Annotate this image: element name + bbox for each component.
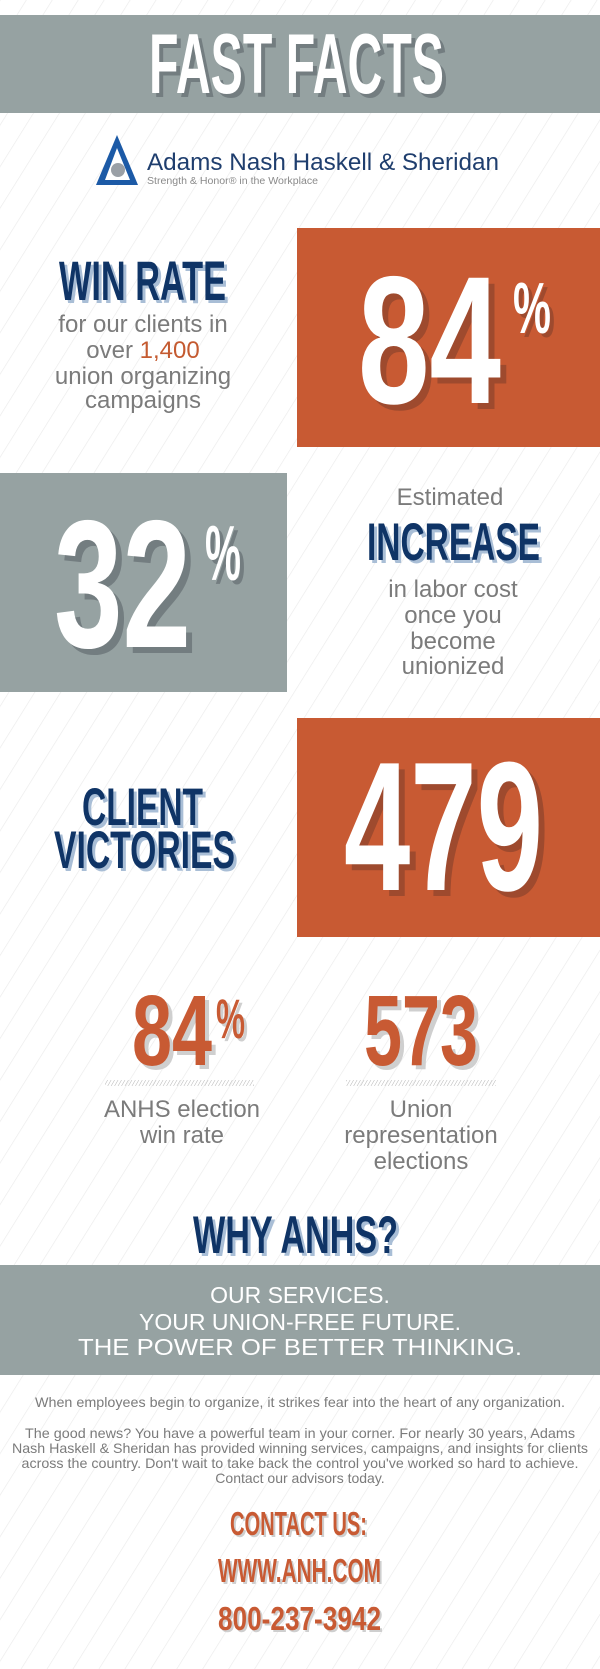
stat: 84% election win rate: win rate bbox=[139, 1122, 224, 1149]
stat: 573 elections: 573 bbox=[368, 979, 482, 1091]
stat: 573 elections: Union bbox=[390, 1096, 452, 1123]
panel: 32% grey box: % bbox=[205, 509, 241, 597]
banner: services: OUR SERVICES. bbox=[210, 1282, 390, 1308]
logo bbox=[96, 135, 499, 187]
stat: 573 elections: representation bbox=[344, 1122, 498, 1149]
panel: 32% grey box: 32 bbox=[60, 488, 197, 692]
banner: services bbox=[0, 1265, 600, 1375]
banner: services: THE POWER OF BETTER THINKING. bbox=[78, 1334, 522, 1360]
contact block: CONTACT US: bbox=[232, 1507, 369, 1544]
stat: 84% election win rate: % bbox=[219, 990, 248, 1053]
contact block bbox=[218, 1505, 383, 1639]
text block: about: Contact our advisors today. bbox=[215, 1470, 385, 1486]
panel: win rate text: for our clients in bbox=[58, 311, 228, 338]
stat: 84% election win rate: % bbox=[216, 987, 245, 1050]
text block: about: The good news? You have a powerful team in your corner. For nearly 30 years, Adams bbox=[25, 1425, 575, 1441]
panel: increase text: Estimated bbox=[397, 484, 503, 511]
stat: 84% election win rate: 84 bbox=[136, 979, 216, 1091]
panel: client victories text: VICTORIES bbox=[54, 821, 235, 880]
logo: Strength & Honor® in the Workplace bbox=[147, 176, 318, 187]
stat: 84% election win rate: ANHS election bbox=[104, 1096, 260, 1123]
stat: 573 elections bbox=[344, 975, 498, 1175]
contact block: CONTACT US: bbox=[230, 1505, 367, 1542]
contact block: 800-237-3942 bbox=[220, 1602, 383, 1639]
text block: about bbox=[12, 1394, 588, 1486]
panel: client victories text bbox=[54, 778, 238, 883]
panel: 84% orange box: % bbox=[517, 273, 555, 353]
contact block: WWW.ANH.COM bbox=[220, 1554, 383, 1591]
banner: services: YOUR UNION-FREE FUTURE. bbox=[139, 1309, 461, 1335]
heading: why anhs bbox=[193, 1206, 401, 1268]
panel: client victories text: CLIENT bbox=[82, 778, 203, 837]
panel: win rate text: WIN RATE bbox=[59, 249, 226, 312]
contact block: 800-237-3942 bbox=[218, 1600, 381, 1637]
panel: increase text: unionized bbox=[402, 653, 504, 680]
text block: about: across the country. Don't wait to take back the control you've worked so hard to achieve. bbox=[22, 1455, 578, 1471]
stat: 84% election win rate bbox=[104, 975, 260, 1149]
panel: 84% orange box: 84 bbox=[358, 238, 501, 442]
panel: increase text: in labor cost bbox=[388, 576, 518, 603]
panel: 84% orange box: % bbox=[513, 269, 551, 349]
panel: 84% orange box: 84 bbox=[364, 244, 507, 448]
panel: 84% orange box bbox=[297, 228, 600, 448]
panel: win rate text bbox=[55, 249, 231, 414]
stat: 84% election win rate: 84 bbox=[132, 975, 212, 1087]
stat: 573 elections: elections bbox=[374, 1148, 468, 1175]
stat: 573 elections: 573 bbox=[364, 975, 478, 1087]
panel: client victories text: CLIENT bbox=[85, 781, 206, 840]
heading: why anhs: WHY ANHS? bbox=[193, 1206, 398, 1265]
panel: increase text: become bbox=[410, 628, 496, 655]
panel: 32% grey box: 32 bbox=[54, 482, 191, 686]
panel: 32% grey box bbox=[0, 473, 287, 692]
text block: about: When employees begin to organize, it strikes fear into the heart of any organization. bbox=[35, 1394, 565, 1410]
panel: 32% grey box: % bbox=[209, 513, 245, 601]
logo: Adams Nash Haskell & Sheridan bbox=[147, 149, 499, 176]
panel: win rate text: WIN RATE bbox=[62, 252, 229, 315]
icon: triangle logo bbox=[96, 135, 138, 185]
panel: client victories text: VICTORIES bbox=[57, 824, 238, 883]
heading: why anhs: WHY ANHS? bbox=[196, 1209, 401, 1268]
text block: about: Nash Haskell & Sheridan has provided winning services, campaigns, and insights for clients bbox=[12, 1440, 588, 1456]
panel: increase text bbox=[367, 484, 543, 680]
panel: win rate text: campaigns bbox=[85, 387, 201, 414]
contact block: WWW.ANH.COM bbox=[218, 1552, 381, 1589]
panel: increase text: once you bbox=[404, 602, 502, 629]
panel: win rate text: over 1,400 bbox=[86, 337, 200, 364]
panel: win rate text: union organizing bbox=[55, 363, 231, 390]
